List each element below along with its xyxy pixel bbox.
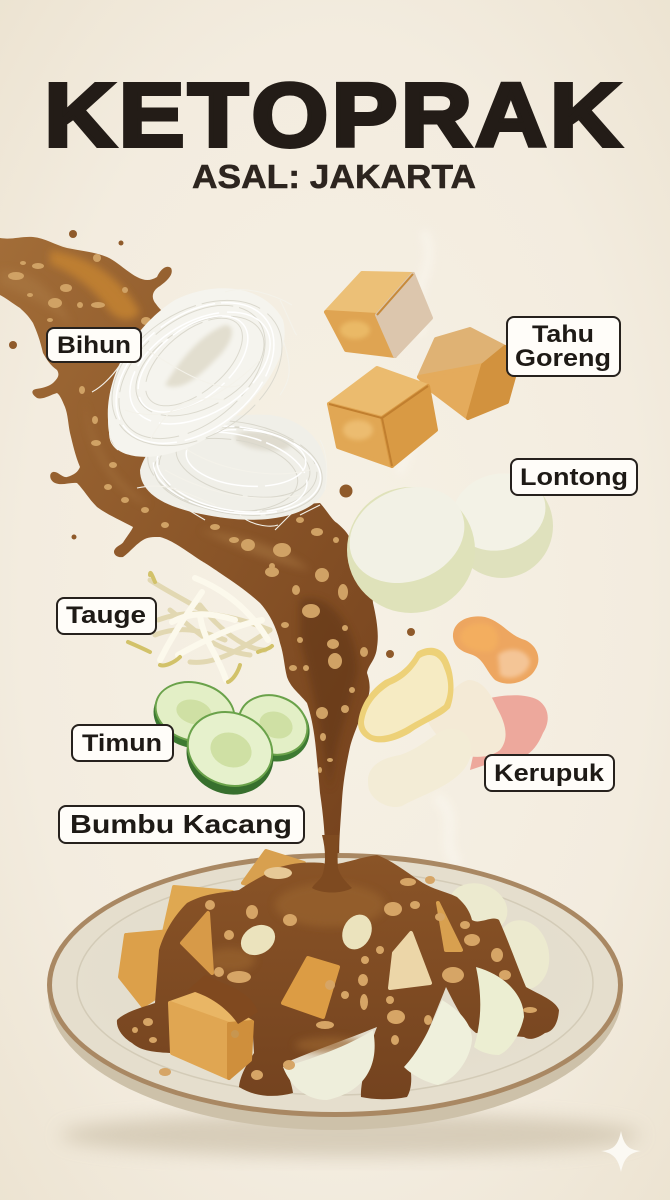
label: Tahu Goreng: Tahu xyxy=(532,321,594,348)
kerupuk crackers xyxy=(358,616,548,807)
plated sauce xyxy=(117,855,559,1099)
icon: sparkle watermark xyxy=(601,1131,641,1172)
tofu cube top xyxy=(326,273,431,356)
tahu goreng cubes xyxy=(326,273,514,466)
tauge bean sprouts xyxy=(128,573,272,682)
plated sauce drip over tofu xyxy=(188,975,258,1024)
label: Kerupuk xyxy=(485,755,614,791)
label: Tauge xyxy=(57,598,156,634)
tofu cube bottom xyxy=(329,368,436,466)
peanut bits xyxy=(8,254,368,773)
lontong slices xyxy=(335,463,554,613)
orange cracker xyxy=(453,616,538,684)
plate xyxy=(47,853,640,1157)
plated front tofu xyxy=(170,903,461,1078)
sauce dark shading xyxy=(300,598,358,790)
subtitle: ASAL: JAKARTA xyxy=(192,158,476,195)
plated back lontong xyxy=(442,875,555,994)
tofu cube right xyxy=(419,329,514,418)
back left slice xyxy=(146,674,242,758)
label: Bumbu Kacang: Bumbu Kacang xyxy=(70,809,292,839)
sauce stream into plate xyxy=(312,835,352,892)
center cream cracker xyxy=(428,680,506,757)
peanut sauce splash xyxy=(0,230,415,890)
label: Tahu Goreng xyxy=(507,317,620,376)
label: Bihun xyxy=(47,328,141,362)
pink cracker xyxy=(470,695,548,770)
front lontong slice xyxy=(335,470,479,613)
label: Timun: Timun xyxy=(82,730,162,757)
bihun noodles xyxy=(85,270,329,530)
sauce droplets xyxy=(9,230,415,658)
yellow cracker xyxy=(358,648,454,742)
front slice xyxy=(175,700,285,807)
plated peanuts xyxy=(132,867,537,1080)
plated front lontong xyxy=(283,967,524,1100)
label: Tahu Goreng: Goreng xyxy=(515,345,611,372)
label: Lontong xyxy=(511,459,637,495)
sauce lighter shading xyxy=(0,270,310,570)
title: KETOPRAK xyxy=(44,65,624,166)
lower noodle nest xyxy=(137,409,329,530)
plated sauce light swirl xyxy=(205,883,385,1053)
plated back tofu xyxy=(120,851,304,1006)
back right slice xyxy=(229,686,319,771)
label: Timun xyxy=(72,725,173,761)
label: Bihun: Bihun xyxy=(57,332,131,359)
sauce orange highlight xyxy=(50,250,140,320)
timun cucumber slices xyxy=(146,674,319,807)
upper noodle nest xyxy=(85,270,309,476)
label: Lontong: Lontong xyxy=(520,464,628,491)
label: Kerupuk: Kerupuk xyxy=(494,760,605,787)
steam wisps xyxy=(400,235,455,860)
bottom cream cracker xyxy=(368,729,471,807)
back lontong slice xyxy=(444,463,554,578)
label: Tauge: Tauge xyxy=(66,602,146,629)
plated ketoprak xyxy=(117,835,559,1100)
label: Bumbu Kacang xyxy=(59,806,304,843)
